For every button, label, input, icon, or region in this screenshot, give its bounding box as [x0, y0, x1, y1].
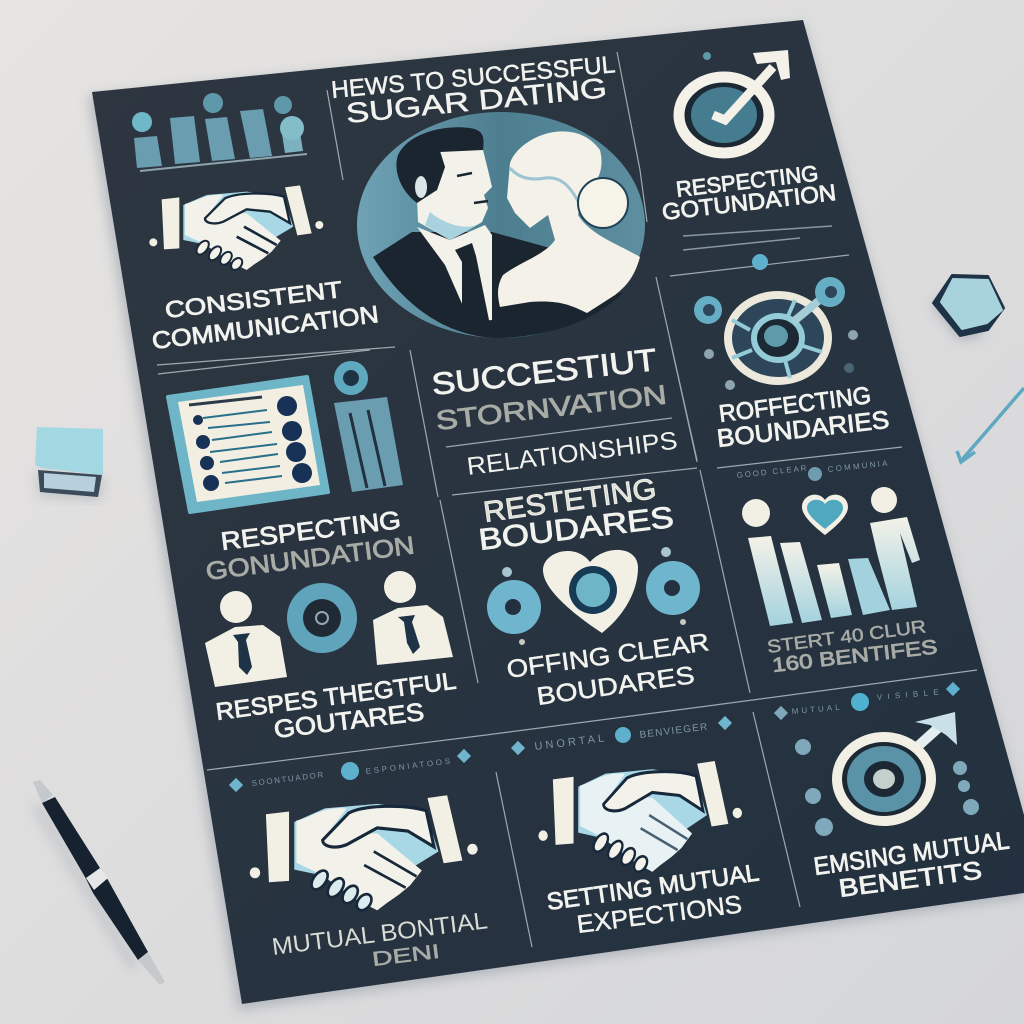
strip: mutual benefit markers: UNORTAL — [534, 733, 605, 753]
icon: columns with dots — [132, 93, 304, 168]
panel: bar chart with people — [736, 459, 938, 677]
text: ensuring mutual benefits — [812, 826, 1011, 903]
text: ensuring mutual benefits: EMSING MUTUAL — [812, 826, 1011, 881]
strip: top caption: GOOD CLEAR — [736, 464, 807, 480]
base line — [140, 154, 307, 171]
icon: target dial — [694, 277, 858, 390]
text: offering clear boundaries — [505, 628, 711, 711]
pen top cap — [33, 780, 53, 803]
text: resteting boundaries: RESTETING — [482, 473, 658, 529]
text: respecting foundation: RESPECTING — [675, 160, 820, 202]
text: setting clear benefits — [766, 616, 938, 677]
divider marker — [752, 254, 768, 270]
text: resteting boundaries — [477, 473, 675, 557]
heading: HEWS TO SUCCESSFUL — [330, 51, 616, 104]
text: roffecting boundaries: ROFFECTING — [717, 382, 873, 428]
text: consistent communication — [151, 276, 380, 355]
icon: heart with two medallions — [487, 547, 700, 645]
dress and suit lower area — [373, 232, 623, 338]
text: successful relationships — [430, 342, 679, 481]
central portrait: man and woman — [357, 112, 645, 338]
text: offering clear boundaries: BOUDARES — [535, 661, 696, 711]
strip: mutual benefit markers: VISIBLE — [876, 688, 939, 702]
pen body — [42, 797, 148, 960]
panel: respecting foundation, middle left — [204, 506, 458, 744]
text: setting mutual expectations — [545, 859, 761, 939]
bar chart — [742, 487, 920, 626]
text: resteting boundaries: BOUDARES — [477, 501, 675, 557]
text: setting mutual expectations: SETTING MUTUAL — [545, 859, 761, 916]
desk object: sticky note block — [35, 427, 104, 500]
strip: mutual benefit markers: SOONTUADOR — [251, 770, 324, 788]
text: roffecting boundaries: BOUNDARIES — [716, 406, 891, 453]
portrait circle — [357, 112, 645, 338]
panel: top left columns — [132, 93, 307, 171]
text: setting mutual expectations: EXPECTIONS — [575, 890, 743, 939]
desk object: eraser — [932, 275, 1004, 340]
panel: ensuring mutual benefits — [795, 712, 1011, 903]
icon: target with arrow — [679, 50, 790, 153]
text: successful relationships: RELATIONSHIPS — [465, 427, 679, 481]
heading — [330, 51, 616, 129]
panel: clear boundaries — [477, 473, 711, 711]
strip: top caption — [736, 459, 889, 481]
text: consistent communication: COMMUNICATION — [151, 301, 380, 355]
icon: target with arrow — [795, 712, 979, 836]
woman — [498, 131, 640, 313]
text: respecting foundation: GONUNDATION — [204, 531, 416, 586]
text: consistent communication: CONSISTENT — [164, 276, 343, 323]
pen clip — [42, 817, 67, 865]
text: successful relationships: SUCCESTIUT — [430, 342, 658, 402]
strip: mutual benefit markers — [229, 682, 960, 792]
strip: top caption: COMMUNIA — [827, 459, 889, 474]
text: respecting foundation — [661, 160, 837, 225]
heading: SUGAR DATING — [345, 72, 608, 129]
text: setting clear benefits: STERT 40 CLUR — [766, 616, 927, 657]
panel: mutual benefit, bottom left — [250, 795, 489, 971]
strip: mutual benefit markers: ESPONIATOOS — [365, 757, 451, 776]
panel: consistent communication — [149, 185, 380, 355]
text: respecting foundation — [204, 506, 416, 586]
panel dividers — [157, 52, 977, 947]
strip: mutual benefit markers: BENVIEGER — [639, 722, 708, 741]
text: respectful boundaries: RESPES THEGTFUL — [214, 668, 458, 726]
text: respecting foundation: GOTUNDATION — [661, 179, 837, 225]
text: roffecting boundaries — [716, 382, 891, 453]
panel: respecting foundation, top right — [661, 50, 837, 270]
pen tip — [138, 952, 165, 985]
pen shadow — [36, 805, 135, 968]
text: successful relationships: STORNVATION — [434, 379, 668, 436]
text: offering clear boundaries: OFFING CLEAR — [505, 628, 711, 684]
man — [396, 127, 492, 333]
text: respecting foundation: RESPECTING — [219, 506, 402, 556]
panel: roffecting boundaries — [694, 277, 891, 453]
icon: handshake — [149, 185, 323, 272]
panel: setting mutual expectations — [538, 761, 761, 939]
text: respectful boundaries: GOUTARES — [272, 698, 426, 744]
strip: mutual benefit markers: MUTUAL — [791, 703, 841, 716]
icon: checklist card — [168, 377, 328, 512]
desk object: compass line — [957, 388, 1024, 462]
text: mutual benefits: MUTUAL BONTIAL — [270, 907, 489, 961]
icon: columns with pin — [334, 361, 403, 492]
text: ensuring mutual benefits: BENETITS — [837, 856, 984, 903]
text: setting clear benefits: 160 BENTIFES — [771, 636, 938, 677]
icon: handshake — [538, 761, 742, 875]
caption lines — [683, 226, 832, 250]
icon: two people with emblem — [205, 571, 453, 687]
panel: checklist — [168, 361, 403, 512]
pen ring — [86, 868, 108, 890]
text: mutual benefits: DENI — [371, 941, 441, 971]
icon: handshake — [250, 795, 478, 913]
desk object: pen — [33, 780, 165, 985]
